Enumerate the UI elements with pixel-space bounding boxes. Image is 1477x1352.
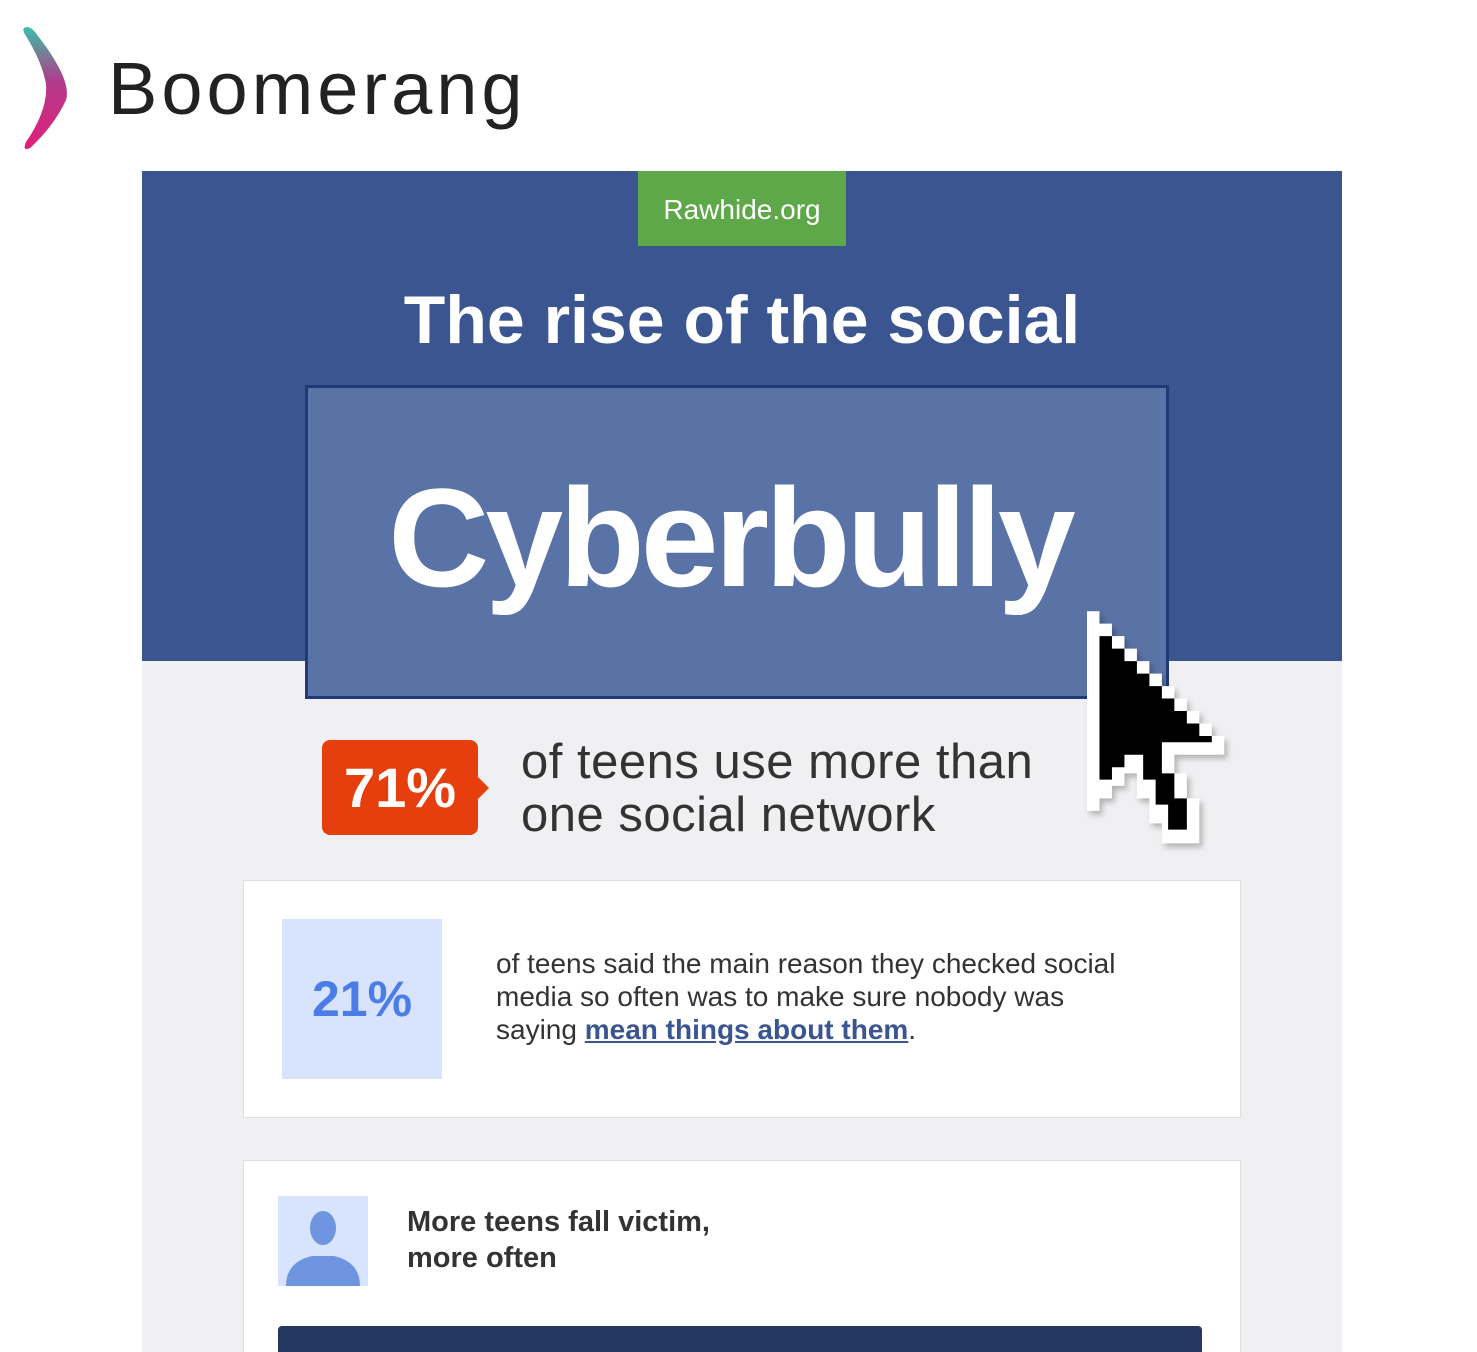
logo: boomerang icon	[23, 27, 67, 150]
stat text 21%: of teens said the main reason they checked social media so often was to make sure nobody was saying mean things about them.	[496, 948, 1115, 1045]
heading	[407, 1206, 710, 1274]
card: 21%	[243, 880, 1241, 1118]
title: The rise of the social	[404, 282, 1080, 358]
icon: mouse cursor	[1087, 611, 1230, 850]
card: victims	[243, 1160, 1241, 1352]
icon: avatar	[278, 1196, 368, 1286]
stat text 71%: one social network	[521, 788, 936, 842]
headline box: Cyberbully	[388, 459, 1072, 616]
heading: more often	[407, 1242, 557, 1274]
dark bar	[278, 1326, 1202, 1352]
header band	[142, 171, 1342, 661]
stat text 71%: of teens use more than	[521, 735, 1033, 789]
stat box 21%: 21%	[312, 971, 412, 1027]
heading: More teens fall victim,	[407, 1206, 710, 1238]
stat badge 71%: 71%	[344, 756, 456, 819]
stat badge 71%	[322, 740, 478, 835]
logo: wordmark: Boomerang	[108, 47, 527, 130]
source tag	[638, 171, 846, 246]
source tag: Rawhide.org	[663, 194, 821, 225]
stat text 71%	[521, 735, 1033, 842]
stat box 21%	[282, 919, 442, 1079]
headline box	[305, 385, 1169, 699]
panel: main infographic	[142, 171, 1342, 1352]
